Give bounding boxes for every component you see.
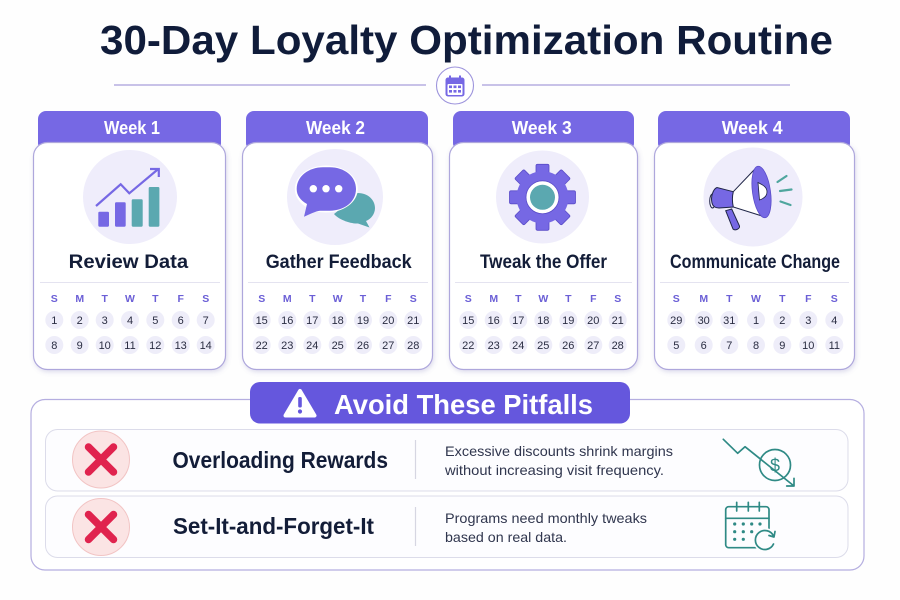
calendar: week 2: 18 (332, 315, 344, 327)
calendar: week 4 (667, 293, 843, 354)
calendar: week 4: S (831, 293, 838, 305)
heading: communicate change: Communicate Change (670, 251, 840, 273)
calendar: week 1: 7 (203, 315, 209, 327)
calendar: week 3: 25 (537, 340, 549, 352)
calendar: week 3: W (538, 293, 548, 305)
banner: avoid these pitfalls: Avoid These Pitfalls (334, 389, 593, 420)
icon: red x (72, 498, 130, 556)
calendar: week 3: 19 (562, 315, 574, 327)
calendar: week 4: W (751, 293, 761, 305)
week 1 tab: Week 1 (104, 118, 160, 138)
description: based on real data. (445, 529, 567, 545)
calendar: week 3: T (515, 293, 522, 305)
week 1 tab (38, 111, 221, 151)
calendar: week 1: 6 (178, 315, 184, 327)
calendar: week 2: 17 (306, 315, 318, 327)
calendar: week 2: S (410, 293, 417, 305)
icon: megaphone (704, 148, 802, 246)
calendar: week 2: 16 (281, 315, 293, 327)
calendar: week 2: 25 (332, 340, 344, 352)
calendar: week 2: 20 (382, 315, 394, 327)
panel: week 3 (450, 111, 638, 370)
heading: tweak the offer: Tweak the Offer (480, 251, 607, 273)
calendar: week 3: 24 (512, 340, 524, 352)
calendar: week 3: F (590, 293, 597, 305)
calendar: week 2: 19 (357, 315, 369, 327)
calendar: week 4: 31 (723, 315, 735, 327)
calendar: week 1: 10 (99, 340, 111, 352)
week 2 card (242, 142, 432, 370)
calendar: week 2: 27 (382, 340, 394, 352)
calendar: week 3: 28 (612, 340, 624, 352)
calendar: week 2: 28 (407, 340, 419, 352)
calendar: week 1: S (202, 293, 209, 305)
calendar: week 3 (459, 293, 627, 354)
row: set-it-and-forget-it (46, 496, 848, 558)
calendar: week 3: 23 (488, 340, 500, 352)
week 2 tab: Week 2 (306, 118, 365, 138)
calendar: week 1 (45, 293, 215, 354)
description: without increasing visit frequency. (444, 462, 664, 478)
calendar: week 4: T (726, 293, 733, 305)
calendar: week 4: 9 (779, 340, 785, 352)
icon: recurring calendar (726, 502, 777, 552)
calendar: week 3: 17 (512, 315, 524, 327)
calendar: week 1: S (51, 293, 58, 305)
description: Excessive discounts shrink margins (445, 443, 673, 459)
week 4 card (654, 142, 854, 370)
calendar: week 4: M (699, 293, 708, 305)
row: set-it-and-forget-it: Set-It-and-Forget-It (173, 513, 374, 539)
calendar: week 1: 14 (200, 340, 212, 352)
calendar: week 1: 9 (77, 340, 83, 352)
calendar: week 2: F (385, 293, 392, 305)
calendar: week 3: 16 (488, 315, 500, 327)
calendar: week 4: 8 (753, 340, 759, 352)
calendar: week 4: 6 (701, 340, 707, 352)
title: 30-Day Loyalty Optimization Routine (100, 17, 833, 63)
calendar: week 2: 21 (407, 315, 419, 327)
calendar: week 3: T (565, 293, 572, 305)
calendar: week 2: 15 (256, 315, 268, 327)
panel: pitfalls (31, 382, 864, 570)
calendar: week 1: T (101, 293, 108, 305)
calendar: week 1: 1 (51, 315, 57, 327)
calendar: week 4: 11 (829, 340, 840, 352)
calendar: week 3: 27 (587, 340, 599, 352)
calendar: week 1: 4 (127, 315, 133, 327)
calendar: week 2: M (283, 293, 292, 305)
calendar: week 4: F (805, 293, 812, 305)
calendar: week 1: T (152, 293, 159, 305)
heading: review data: Review Data (69, 251, 188, 273)
calendar: week 3: S (614, 293, 621, 305)
week 3 tab (453, 111, 634, 151)
description (444, 443, 673, 478)
calendar: week 3: 20 (587, 315, 599, 327)
calendar: week 1: 12 (149, 340, 161, 352)
calendar: week 1: 11 (124, 340, 136, 352)
calendar: week 2: 23 (281, 340, 293, 352)
calendar: week 4: 7 (726, 340, 732, 352)
week 1 card (34, 142, 226, 370)
description (445, 510, 647, 545)
week 2 tab (246, 111, 428, 151)
calendar: week 3: M (489, 293, 498, 305)
banner: avoid these pitfalls (250, 382, 630, 424)
icon: gear (496, 150, 589, 244)
calendar: week 4: 5 (673, 340, 679, 352)
calendar: week 1: 8 (51, 340, 57, 352)
calendar: week 2 (253, 293, 422, 354)
calendar: week 1: 2 (77, 315, 83, 327)
calendar: week 1: F (177, 293, 184, 305)
description: Programs need monthly tweaks (445, 510, 647, 526)
icon: red x (72, 431, 130, 488)
calendar: week 1: 5 (152, 315, 158, 327)
calendar: week 4: 3 (805, 315, 811, 327)
week 4 tab: Week 4 (722, 118, 783, 138)
calendar: week 1: W (125, 293, 135, 305)
calendar: week 4: 4 (831, 315, 837, 327)
panel: week 4 (654, 111, 854, 370)
icon: falling dollar: $ (770, 456, 780, 476)
calendar: week 1: 13 (175, 340, 187, 352)
calendar: week 3: 18 (537, 315, 549, 327)
row: overloading rewards: Overloading Rewards (172, 447, 388, 473)
calendar: week 2: S (258, 293, 265, 305)
calendar: week 1: 3 (102, 315, 108, 327)
calendar: week 2: T (360, 293, 367, 305)
title divider with calendar badge (114, 67, 790, 104)
calendar: week 4: 30 (698, 315, 710, 327)
calendar: week 4: 10 (802, 340, 814, 352)
calendar: week 2: W (333, 293, 343, 305)
icon: speech bubbles (287, 149, 383, 245)
calendar: week 1: M (75, 293, 84, 305)
panel: week 1 (34, 111, 226, 370)
panel: week 2 (242, 111, 432, 370)
calendar: week 4: 1 (753, 315, 759, 327)
calendar: week 4: 2 (779, 315, 785, 327)
calendar: week 4: T (779, 293, 786, 305)
icon: rising bar chart (83, 150, 177, 244)
week 3 tab: Week 3 (512, 118, 572, 138)
week 4 tab (658, 111, 850, 151)
calendar: week 3: 15 (462, 315, 474, 327)
calendar: week 4: 29 (670, 315, 682, 327)
calendar: week 3: 26 (562, 340, 574, 352)
calendar: week 2: T (309, 293, 316, 305)
calendar: week 2: 24 (306, 340, 318, 352)
calendar: week 3: 22 (462, 340, 474, 352)
calendar: week 2: 22 (256, 340, 268, 352)
row: overloading rewards (46, 430, 848, 491)
calendar: week 3: 21 (612, 315, 624, 327)
week 3 card (450, 142, 638, 370)
heading: gather feedback: Gather Feedback (266, 251, 412, 273)
calendar: week 3: S (465, 293, 472, 305)
icon: warning triangle (286, 391, 314, 416)
calendar: week 2: 26 (357, 340, 369, 352)
calendar: week 4: S (673, 293, 680, 305)
icon: falling dollar (723, 439, 794, 486)
